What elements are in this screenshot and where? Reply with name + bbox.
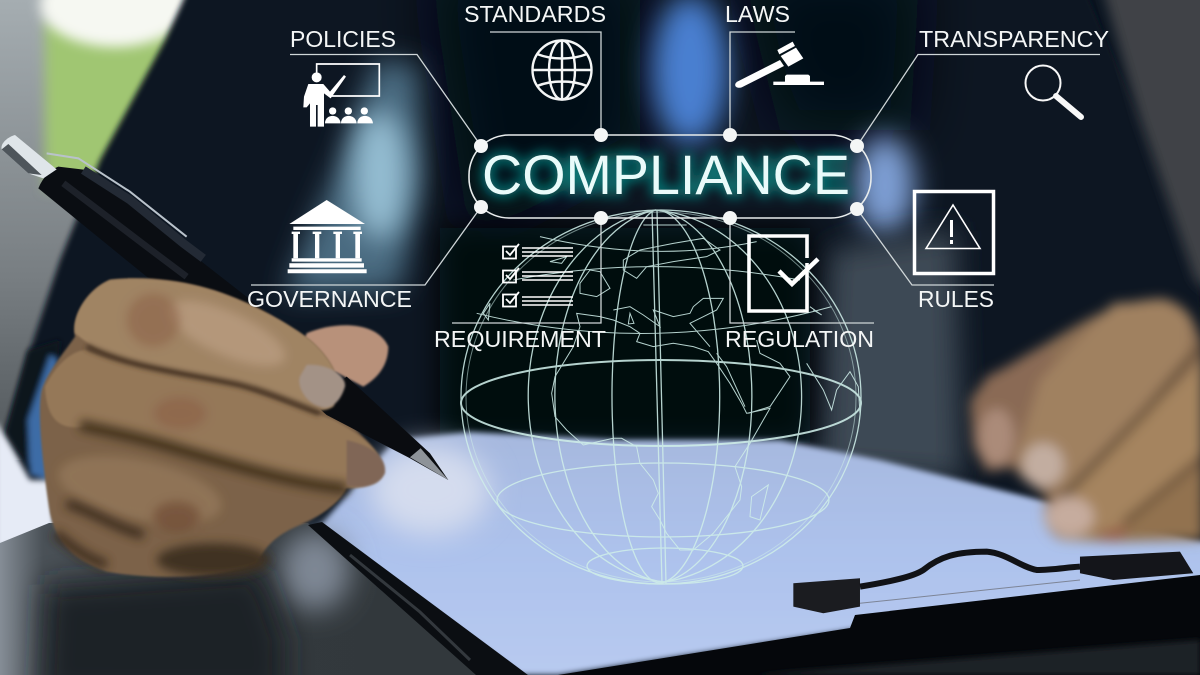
icon: checklist bbox=[503, 244, 573, 306]
clipboard clip bbox=[793, 552, 1193, 613]
pen barrel bbox=[1, 135, 293, 333]
icon: globe bbox=[532, 40, 592, 100]
label: standards: STANDARDS bbox=[464, 1, 606, 27]
pen tip bbox=[313, 377, 448, 480]
blurred shirt and highlights bbox=[285, 0, 962, 480]
icon: teacher at board bbox=[303, 64, 379, 127]
compliance pill and glow bbox=[469, 135, 871, 218]
label: laws: LAWS bbox=[725, 1, 790, 27]
label: governance: GOVERNANCE bbox=[247, 286, 412, 312]
meridians bbox=[528, 210, 665, 582]
connector lines bbox=[251, 32, 1100, 323]
left hand bbox=[40, 279, 388, 577]
connector nodes bbox=[474, 128, 864, 225]
label: policies: POLICIES bbox=[290, 26, 396, 52]
sleeve bbox=[5, 340, 60, 490]
right hand bbox=[970, 298, 1200, 542]
paper bbox=[318, 432, 1200, 675]
thumb bbox=[300, 325, 388, 387]
label: transparency: TRANSPARENCY bbox=[919, 26, 1109, 52]
white surface left bbox=[0, 420, 55, 550]
index finger bbox=[75, 279, 345, 413]
icon: gavel bbox=[735, 42, 824, 88]
table bbox=[0, 523, 478, 675]
title: compliance: COMPLIANCE bbox=[482, 143, 850, 206]
clipboard edge bbox=[308, 522, 528, 675]
continents and parallels bbox=[477, 225, 860, 550]
icon: magnifier bbox=[1026, 66, 1081, 117]
icon: warning sign bbox=[914, 192, 994, 274]
middle finger bbox=[45, 350, 385, 488]
icon: temple bbox=[288, 200, 367, 273]
suit bbox=[5, 0, 1200, 500]
hand mass bbox=[40, 279, 385, 577]
title: compliance glow: COMPLIANCE bbox=[482, 143, 850, 206]
globe wireframe bbox=[461, 210, 861, 584]
label: requirement: REQUIREMENT bbox=[434, 326, 606, 352]
ring finger highlight bbox=[52, 443, 228, 537]
clipboard base bbox=[558, 575, 1200, 675]
label: regulation: REGULATION bbox=[725, 326, 874, 352]
window and wall bbox=[0, 0, 220, 460]
icon: regulation checkbox bbox=[749, 236, 818, 311]
label: rules: RULES bbox=[918, 286, 994, 312]
